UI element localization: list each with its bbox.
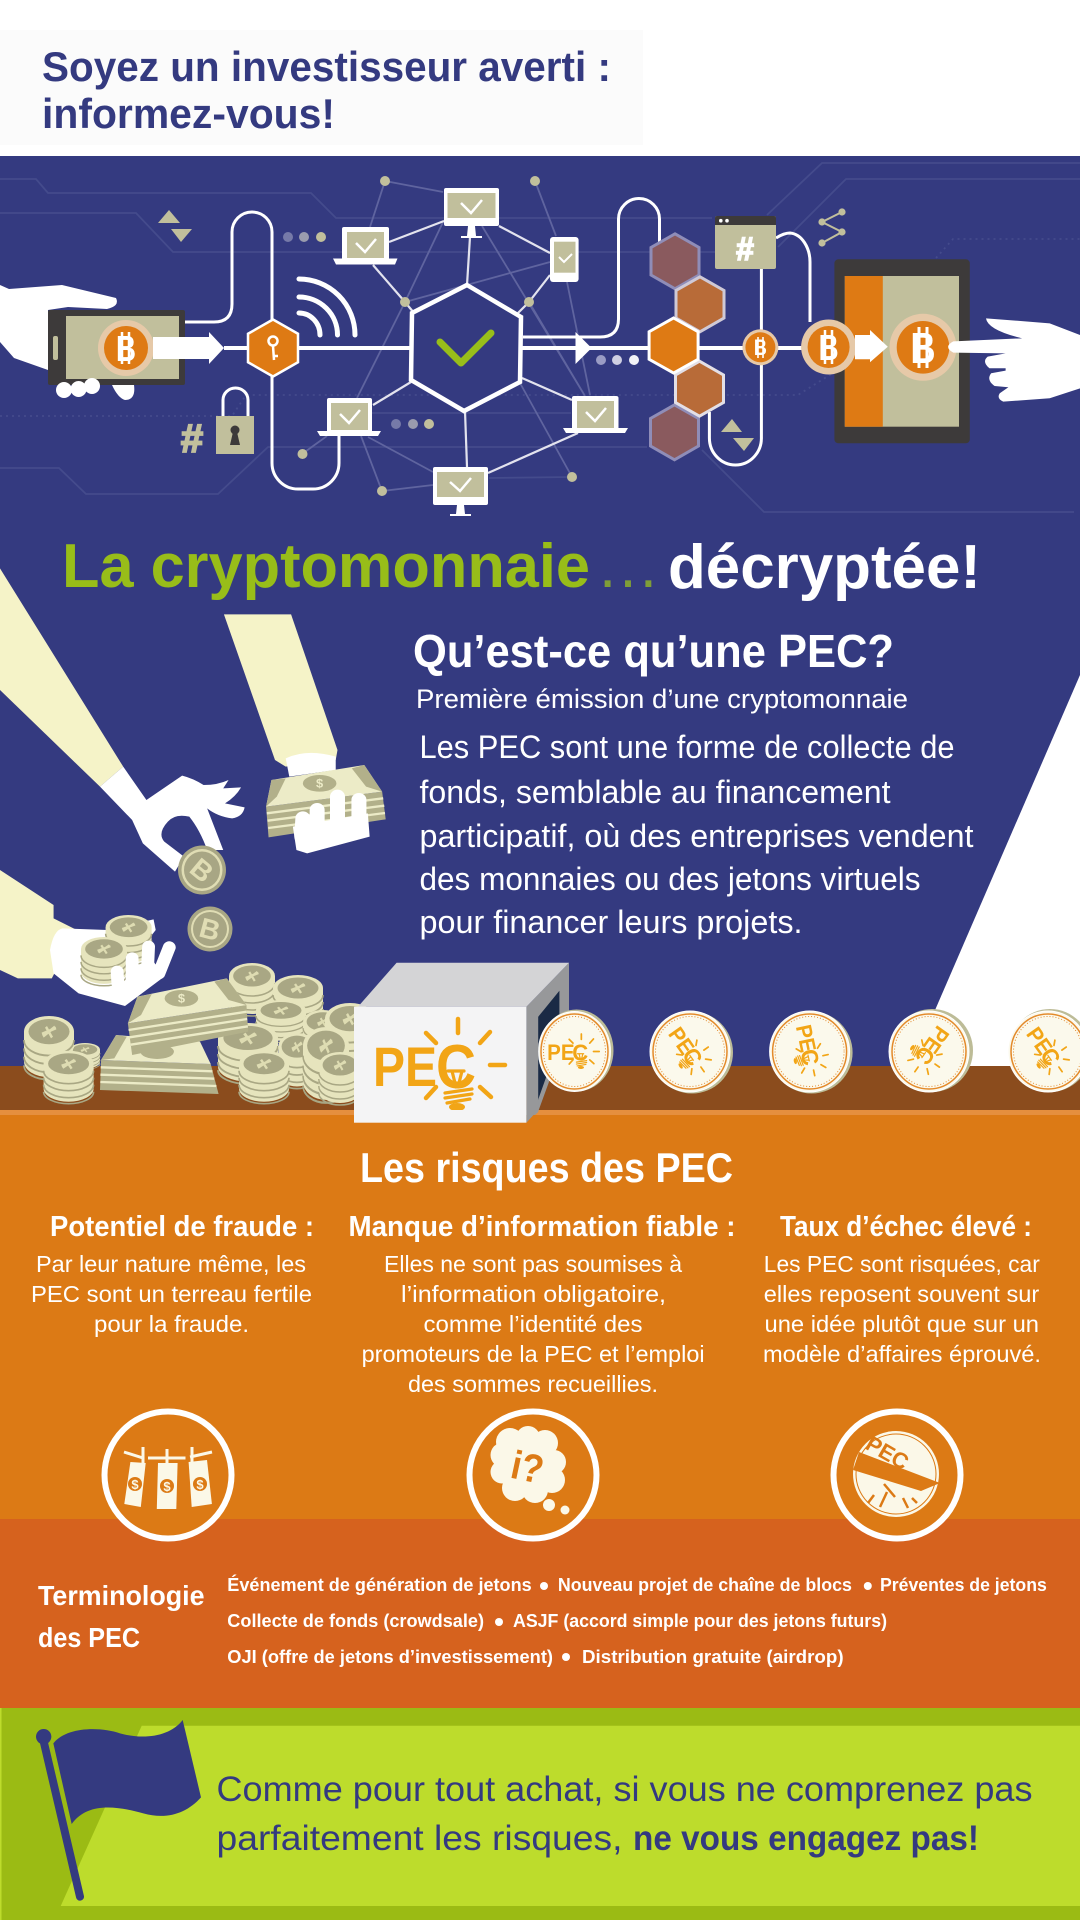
coin: PEC 2 [650, 1011, 733, 1094]
pile of coins and bills [24, 963, 375, 1105]
icon: money on a clothesline: $ [163, 1479, 171, 1494]
icon: padlock with hash [181, 388, 254, 461]
heading: la cryptomonnaie decryptee: La cryptomonnaie [62, 532, 590, 601]
icon: smartphone node [550, 237, 579, 282]
coin: PEC 5: C [1035, 1043, 1066, 1071]
column: fraud [31, 1211, 314, 1337]
heading: la cryptomonnaie decryptee: ... [599, 532, 657, 601]
icon: share nodes [818, 208, 846, 247]
ICO box lower part over risks panel [354, 1110, 526, 1123]
arm reaching with coin [0, 568, 245, 872]
ICO box lower side [526, 1110, 538, 1123]
icon: laptop upper left [333, 227, 398, 264]
text block: terminology list: OJI (offre de jetons d’investissement) [227, 1647, 553, 1667]
ICO box back side [526, 963, 569, 1123]
icon: falling bitcoin coin 1: B [184, 852, 219, 889]
ICO box [354, 963, 569, 1123]
text block: terminology heading [38, 1580, 204, 1653]
ICO box: PE [373, 1035, 437, 1098]
icon: thought bubble [470, 1412, 596, 1538]
icon: medium bitcoin coin: B [819, 327, 839, 368]
coins held by hand [81, 915, 152, 986]
icon: falling bitcoin coin 1 [178, 846, 226, 894]
icon: laptop lower right [563, 396, 628, 433]
arm with coin stack [0, 870, 164, 1006]
coin: PEC 4: C [910, 1042, 940, 1070]
text block: warning message: ne vous engagez pas! [633, 1819, 979, 1858]
text block: terminology list: Préventes de jetons [880, 1575, 1047, 1595]
panel: risks background [0, 1115, 1080, 1519]
title panel: Soyez un investisseur averti : [42, 43, 611, 90]
icon: monitor top [444, 188, 499, 238]
spotlight [910, 675, 1080, 1068]
text block: terminology list: Événement de génération de jetons [227, 1574, 532, 1595]
hand fingers over coins [117, 947, 169, 983]
icon: thought bubble: i? [507, 1443, 548, 1493]
icon: large bitcoin coin: B [910, 324, 936, 373]
column: lack of information: comme l’identité des [424, 1311, 642, 1337]
text block: what is an ICO [413, 625, 974, 940]
coin: PEC 3: PE [791, 1022, 821, 1054]
text block: what is an ICO: des monnaies ou des jetons virtuels [420, 861, 920, 897]
page background [0, 0, 1080, 156]
column: high failure rate: une idée plutôt que sur un [764, 1311, 1039, 1337]
heading: la cryptomonnaie decryptee: décryptée! [668, 533, 981, 602]
icon: small bitcoin coin: B [754, 335, 767, 360]
column: high failure rate: elles reposent souvent sur [764, 1281, 1040, 1307]
icon: key hexagon [248, 320, 298, 376]
illustration: arms and hands [0, 568, 386, 1006]
coin: PEC 2: C [677, 1043, 708, 1071]
icon: hash window: # [736, 231, 754, 267]
coin: PEC 5: PE [1021, 1022, 1058, 1059]
icon: pointing hand [948, 318, 1080, 402]
icon: broken coin [834, 1412, 960, 1538]
bills in hand: $ [316, 777, 323, 791]
arm holding bills [224, 614, 337, 777]
icon: falling bitcoin coin 2: B [196, 912, 224, 947]
upper bills: $ [178, 992, 185, 1006]
icon: money on a clothesline: $ [131, 1477, 139, 1492]
icon: hash window [715, 216, 776, 269]
icon: tablet [834, 259, 970, 443]
icon: central validation hexagon [411, 285, 521, 411]
text block: what is an ICO: Première émission d’une cryptomonnaie [416, 684, 908, 714]
text block: terminology list: Nouveau projet de chaîne de blocs [558, 1575, 852, 1595]
text block: warning message: parfaitement les risques, [216, 1819, 622, 1858]
main data line [224, 346, 803, 350]
panel: warning footer [0, 1708, 1080, 1920]
connector loops [185, 198, 810, 489]
blockchain network diagram [298, 176, 628, 516]
coin: PEC 3: C [795, 1047, 824, 1068]
circuit background lines [0, 163, 1080, 512]
lower bills [100, 1035, 219, 1094]
coin: PEC 1 [538, 1010, 614, 1092]
text block: what is an ICO: Les PEC sont une forme de collecte de [420, 729, 954, 765]
text block: terminology list: Collecte de fonds (crowdsale) [227, 1611, 484, 1631]
hand over bills [293, 797, 370, 853]
column: fraud: Par leur nature même, les [36, 1251, 306, 1277]
column: lack of information: l’information obligatoire, [401, 1281, 666, 1307]
icon: large bitcoin coin [890, 314, 956, 381]
column: lack of information [348, 1211, 736, 1397]
column: lack of information: des sommes recueillies. [408, 1371, 658, 1397]
text block: terminology list: ASJF (accord simple pour des jetons futurs) [513, 1611, 887, 1631]
column: fraud: pour la fraude. [94, 1311, 249, 1337]
icon: broken coin: PEC [862, 1431, 913, 1475]
icon: blockchain hexagons [649, 234, 724, 460]
text block: terminology heading: des PEC [38, 1622, 140, 1653]
column: lack of information: Elles ne sont pas soumises à [384, 1251, 682, 1277]
table [0, 1066, 1080, 1115]
icon: warning flag [36, 1720, 201, 1897]
coin: PEC 2: PE [663, 1022, 700, 1059]
ICO box side strip [526, 1000, 538, 1123]
decor triangles and dots [158, 210, 754, 451]
column: high failure rate: Les PEC sont risquées, car [764, 1251, 1040, 1277]
arrow: in tablet [855, 330, 888, 362]
text block: what is an ICO: pour financer leurs projets. [420, 904, 802, 940]
coin: PEC 1: C [572, 1040, 588, 1066]
column: lack of information: promoteurs de la PEC et l’emploi [362, 1341, 705, 1367]
heading: risks: Les risques des PEC [360, 1144, 733, 1191]
coin: PEC 1: PE [547, 1040, 574, 1065]
icon: padlock with hash: # [181, 417, 203, 461]
title panel [0, 30, 643, 145]
icon: falling bitcoin coin 2 [188, 906, 232, 952]
icon: bitcoin coin on phone: B [116, 328, 136, 369]
column: lack of information: Manque d’information fiable : [348, 1211, 736, 1243]
text block: terminology list [227, 1574, 1047, 1667]
title panel: informez-vous! [42, 90, 335, 137]
coin: PEC 5 [1008, 1009, 1080, 1092]
coin: PEC 3 [770, 1011, 853, 1094]
bills in hand [266, 765, 386, 837]
text block: what is an ICO: participatif, où des entreprises vendent [420, 818, 974, 854]
panel: blue background [0, 156, 1080, 1068]
ICO box: C [436, 1033, 476, 1102]
column: fraud: Potentiel de fraude : [50, 1211, 314, 1243]
icon: monitor bottom [433, 467, 488, 516]
coin: PEC 4 [889, 1009, 973, 1092]
arrow: phone to key [153, 332, 224, 364]
icon: money on a clothesline: $ [196, 1477, 204, 1492]
upper bills [128, 978, 248, 1055]
icon: laptop lower left [317, 398, 381, 436]
panel: terminology background [0, 1519, 1080, 1708]
icon: bitcoin coin on phone [98, 320, 154, 376]
arrow: to blockchain [576, 332, 592, 364]
column: high failure rate: Taux d’échec élevé : [780, 1211, 1032, 1243]
icon: small bitcoin coin [742, 329, 778, 365]
text block: what is an ICO: Qu’est-ce qu’une PEC? [413, 625, 894, 677]
heading: la cryptomonnaie decryptee [62, 532, 981, 602]
icon: hand holding phone [0, 285, 185, 400]
column: high failure rate [763, 1211, 1041, 1367]
text block: warning message [216, 1770, 1032, 1858]
network nodes [298, 176, 577, 496]
icon: medium bitcoin coin [801, 320, 856, 374]
icon: wifi arcs [299, 279, 355, 335]
text block: warning message: Comme pour tout achat, si vous ne comprenez pas [216, 1770, 1032, 1809]
text block: terminology list: Distribution gratuite (airdrop) [582, 1647, 844, 1667]
text block: terminology heading: Terminologie [38, 1580, 204, 1611]
text block: what is an ICO: fonds, semblable au financement [420, 774, 891, 810]
icon: money on a clothesline [104, 1412, 232, 1538]
column: high failure rate: modèle d’affaires éprouvé. [763, 1341, 1041, 1367]
column: fraud: PEC sont un terreau fertile [31, 1281, 312, 1307]
coin: PEC 4: PE [918, 1021, 954, 1058]
